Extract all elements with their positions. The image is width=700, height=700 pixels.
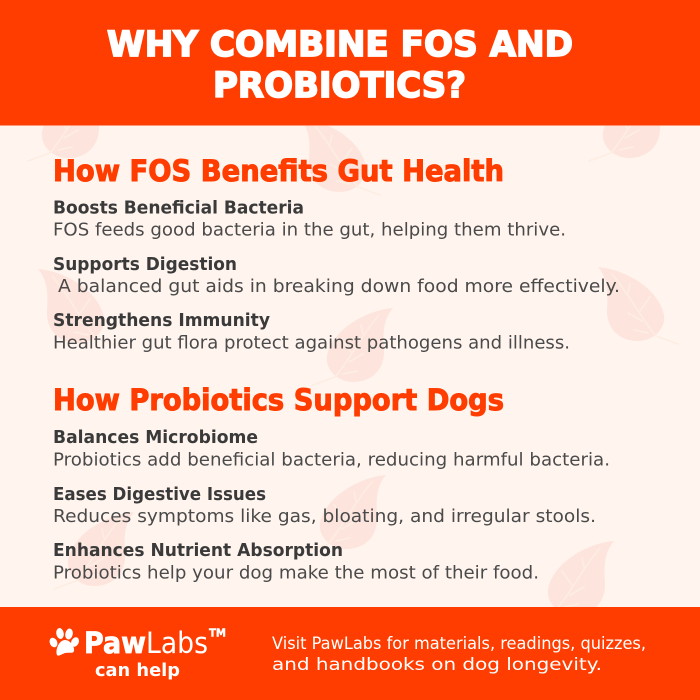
benefit: boosts beneficial bacteria (53, 198, 566, 240)
footer band (0, 607, 700, 700)
benefit: enhances nutrient absorption: Probiotics help your dog make the most of their food. (53, 564, 539, 584)
footer text: and handbooks on dog longevity. (272, 655, 602, 675)
header band (0, 0, 700, 126)
benefit: eases digestive issues (53, 485, 596, 527)
benefit: eases digestive issues: Reduces symptoms like gas, bloating, and irregular stools. (53, 507, 596, 527)
logo: PawLabs: Paw (84, 626, 146, 660)
decorative leaves (28, 84, 678, 618)
benefit: enhances nutrient absorption (53, 541, 539, 584)
footer text: Visit PawLabs for materials, readings, quizzes, (272, 634, 646, 654)
benefit: supports digestion: A balanced gut aids in breaking down food more effectively. (58, 277, 620, 297)
heading: probiotics: How Probiotics Support Dogs (53, 383, 504, 417)
benefit: balances microbiome (53, 428, 610, 470)
panel: how FOS benefits gut health (53, 154, 620, 354)
benefit: strengthens immunity: Healthier gut flora protect against pathogens and illness. (53, 334, 570, 354)
logo: PawLabs (84, 626, 226, 660)
benefit: boosts beneficial bacteria: FOS feeds good bacteria in the gut, helping them thrive. (53, 220, 566, 240)
logo: PawLabs: Labs (146, 626, 208, 660)
title: PROBIOTICS? (213, 66, 466, 106)
benefit: balances microbiome: Probiotics add beneficial bacteria, reducing harmful bacteria. (53, 450, 610, 470)
benefit: enhances nutrient absorption: Enhances Nutrient Absorption (53, 541, 343, 561)
logo tagline: can help (95, 660, 180, 681)
benefit: supports digestion: Supports Digestion (53, 255, 237, 275)
benefit: boosts beneficial bacteria: Boosts Beneficial Bacteria (53, 198, 304, 218)
benefit: strengthens immunity: Strengthens Immunity (53, 311, 271, 331)
logo: PawLabs: TM (209, 628, 226, 640)
panel: how probiotics support dogs (53, 383, 610, 584)
heading: FOS: How FOS Benefits Gut Health (53, 154, 504, 188)
title (107, 25, 573, 106)
title: WHY COMBINE FOS AND (107, 25, 573, 65)
benefit: supports digestion (53, 255, 620, 297)
icon: paw print (48, 627, 81, 656)
footer text (272, 634, 646, 675)
benefit: eases digestive issues: Eases Digestive Issues (53, 485, 266, 505)
benefit: strengthens immunity (53, 311, 570, 354)
benefit: balances microbiome: Balances Microbiome (53, 428, 258, 448)
